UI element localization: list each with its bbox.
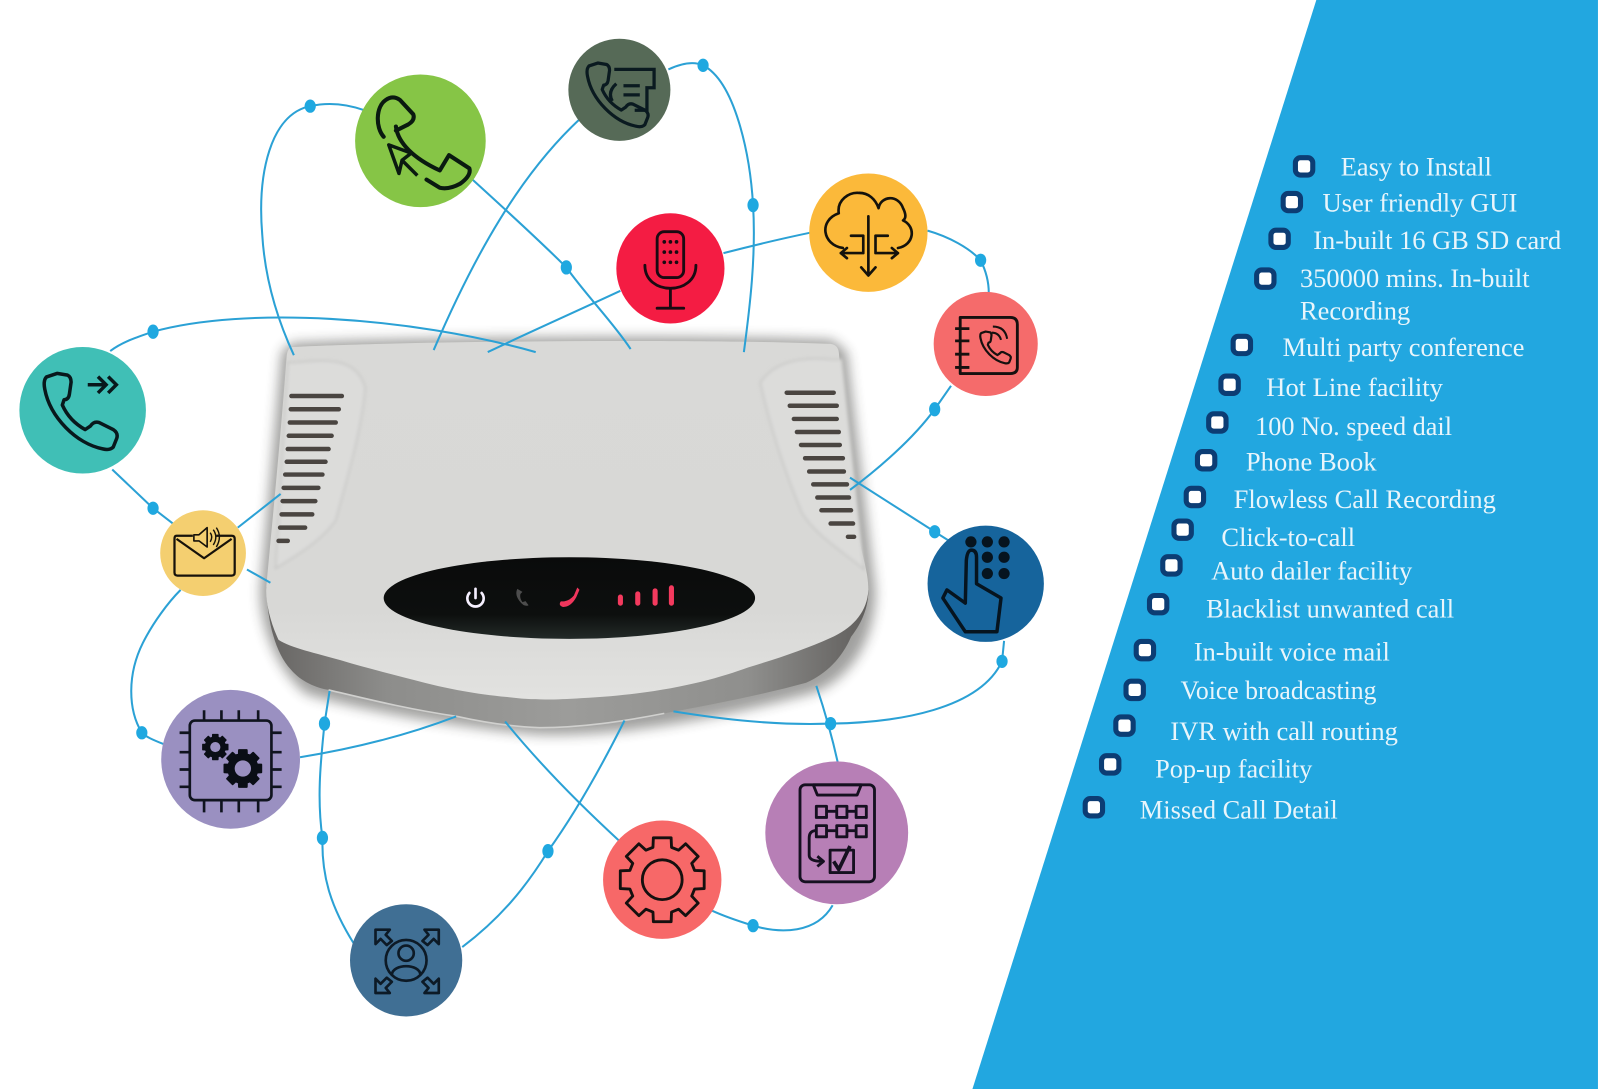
- right vents: [787, 393, 854, 537]
- icon: salmon phone book: [934, 292, 1038, 396]
- item: 350000 mins. In-built Recording: Recording: [1300, 295, 1410, 325]
- item: IVR with call routing: IVR with call routing: [1170, 716, 1398, 746]
- icon: lilac chip with gears: [161, 690, 300, 829]
- item: User friendly GUI: User friendly GUI: [1322, 187, 1517, 217]
- item: Click-to-call: Click-to-call: [1221, 522, 1355, 552]
- item: 100 No. speed dail: 100 No. speed dail: [1255, 411, 1452, 441]
- item: 350000 mins. In-built Recording: 350000 mins. In-built: [1300, 263, 1530, 293]
- device: IP phone recorder box: [260, 337, 876, 735]
- item: Easy to Install: Easy to Install: [1341, 152, 1492, 182]
- device display oval: [384, 557, 755, 639]
- status light: signal bars: [620, 588, 671, 603]
- connector lines: [110, 63, 1004, 947]
- icon: teal call forward: [19, 347, 146, 474]
- item: Flowless Call Recording: Flowless Call Recording: [1234, 484, 1496, 514]
- connector dots: [136, 59, 1008, 932]
- icon: blue keypad hand: [928, 526, 1044, 642]
- item: Missed Call Detail: Missed Call Detail: [1140, 794, 1338, 824]
- item: Pop-up facility: Pop-up facility: [1155, 754, 1313, 784]
- item: Phone Book: Phone Book: [1246, 446, 1377, 476]
- icon: yellow voice mail envelope: [160, 510, 246, 596]
- item: Auto dailer facility: Auto dailer facility: [1211, 556, 1413, 586]
- item: In-built 16 GB SD card: In-built 16 GB SD card: [1313, 225, 1561, 255]
- icon: steel blue user expand: [350, 904, 462, 1016]
- item: Blacklist unwanted call: Blacklist unwanted call: [1206, 593, 1454, 623]
- item: In-built voice mail: In-built voice mail: [1194, 636, 1390, 666]
- status light: red phone: [561, 589, 579, 606]
- item: Hot Line facility: Hot Line facility: [1266, 372, 1444, 402]
- feature list: [1085, 152, 1561, 824]
- item: 350000 mins. In-built Recording: [1257, 263, 1530, 325]
- icon: salmon settings gear: [603, 821, 721, 939]
- icon: olive fax phone: [568, 39, 670, 141]
- left vents: [279, 396, 342, 541]
- icon: green click-to-call handset: [355, 75, 486, 207]
- icon: yellow cloud routing: [809, 173, 928, 292]
- item: Voice broadcasting: Voice broadcasting: [1181, 675, 1377, 705]
- status light: unlit phone: [516, 589, 529, 606]
- status light: power: [467, 589, 484, 607]
- icon: red voice recording microphone: [616, 213, 724, 324]
- icon: purple clipboard flow: [765, 761, 908, 904]
- panel: blue features background: [972, 0, 1598, 1089]
- item: Multi party conference: Multi party conference: [1283, 332, 1524, 362]
